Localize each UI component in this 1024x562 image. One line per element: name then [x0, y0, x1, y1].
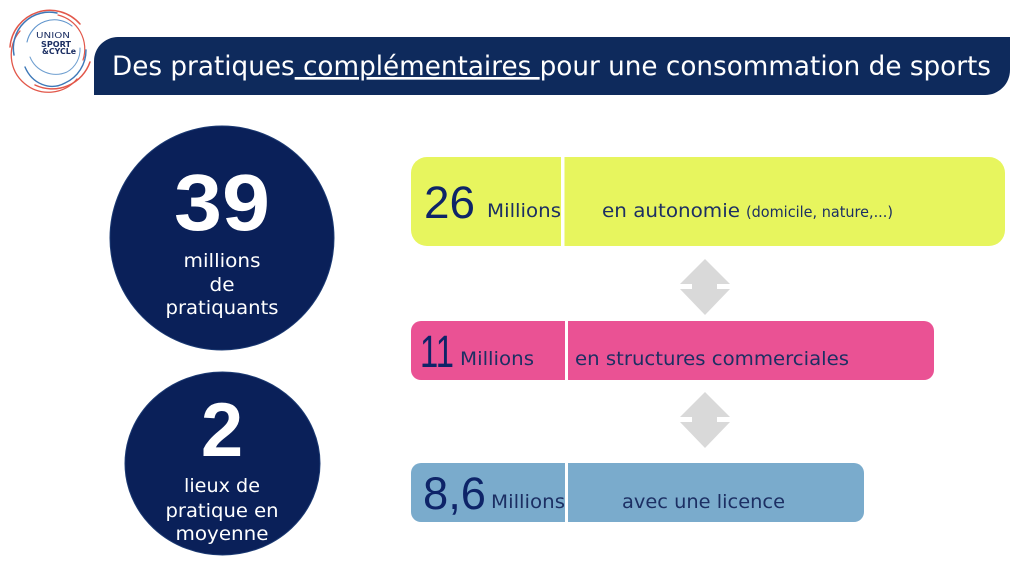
arrow: double arrow between autonomy and commercial: [680, 259, 730, 315]
bar: 26 millions en autonomie: en autonomie: [602, 200, 740, 222]
circle: 2 lieux de pratique en moyenne: [125, 372, 320, 555]
bar: 11 millions en structures commerciales: 11: [420, 326, 454, 377]
bar: 8,6 millions avec une licence: avec une licence: [622, 491, 785, 513]
bar: 11 millions en structures commerciales: [411, 321, 934, 380]
bar: 11 millions en structures commerciales: en structures commerciales: [575, 348, 849, 370]
logo: Union Sport & Cycle: UNION: [36, 31, 70, 40]
circle: 39 millions de pratiquants: [110, 126, 334, 350]
bar: 8,6 millions avec une licence: Millions: [491, 491, 565, 513]
bar: 26 millions en autonomie: (domicile, nature,...): [746, 203, 893, 221]
logo: Union Sport & Cycle: &CYCLe: [42, 47, 77, 56]
circle: 2 lieux de pratique en moyenne: pratique en: [166, 500, 278, 522]
circle: 39 millions de pratiquants: de: [210, 274, 234, 296]
bar: 8,6 millions avec une licence: 8,6: [423, 468, 486, 519]
title text: Des pratiques complémentaires pour une consommation de sports: [112, 51, 991, 82]
bar: 26 millions en autonomie: Millions: [487, 200, 561, 222]
circle: 39 millions de pratiquants: 39: [174, 158, 270, 247]
circle: 39 millions de pratiquants: millions: [184, 250, 260, 272]
bar: 8,6 millions avec une licence: [411, 463, 864, 522]
logo: Union Sport & Cycle: SPORT: [41, 40, 72, 49]
circle: 39 millions de pratiquants: pratiquants: [166, 297, 278, 319]
arrow: double arrow between commercial and licence: [680, 392, 730, 448]
circle: 2 lieux de pratique en moyenne: lieux de: [184, 475, 260, 497]
bar: 11 millions en structures commerciales: Millions: [460, 348, 534, 370]
circle: 2 lieux de pratique en moyenne: moyenne: [176, 523, 268, 545]
logo: Union Sport & Cycle: [10, 10, 90, 92]
title banner: [94, 37, 1010, 95]
bar: 26 millions en autonomie: 26: [424, 177, 475, 228]
circle: 2 lieux de pratique en moyenne: 2: [201, 388, 243, 473]
bar: 26 millions en autonomie: [411, 157, 1005, 246]
